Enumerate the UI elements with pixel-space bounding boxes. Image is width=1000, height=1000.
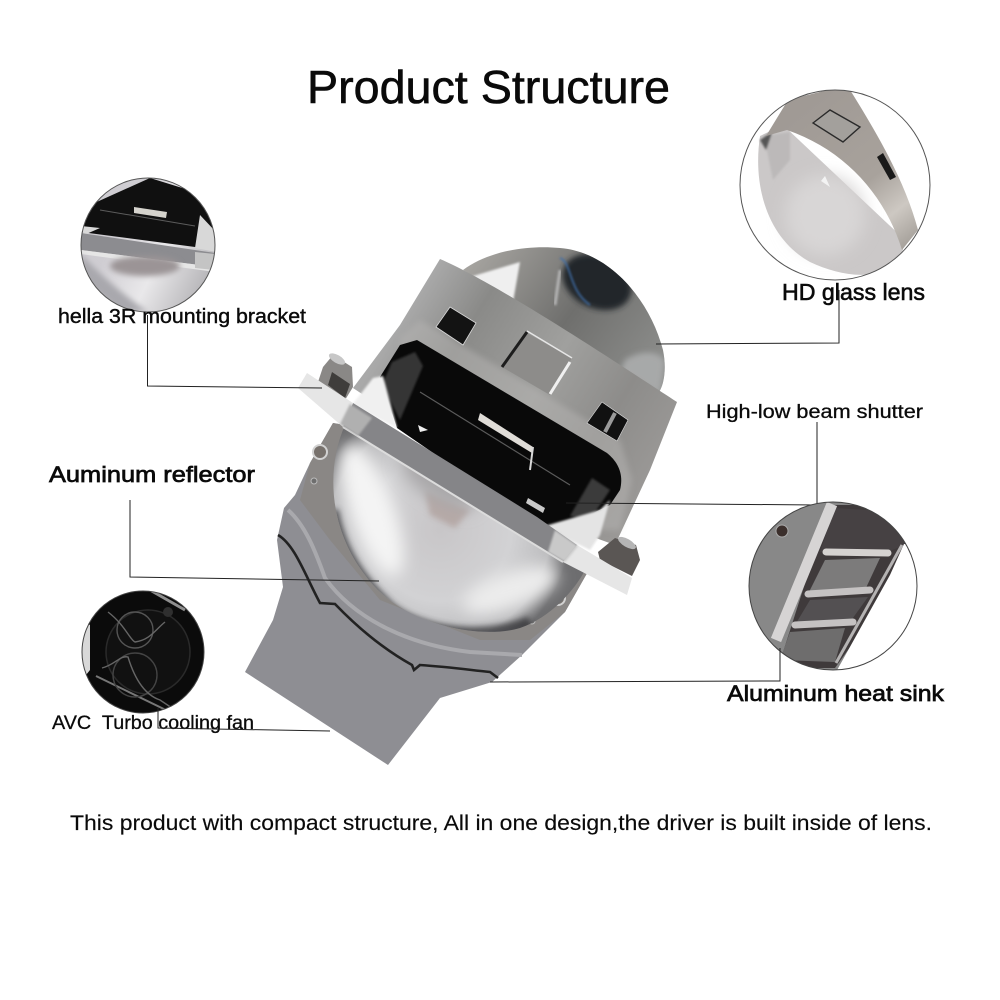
fan zoom circle: [82, 590, 206, 714]
callout: shutter: [566, 401, 924, 505]
white reflector highlights in opening: [352, 376, 610, 550]
bracket leader line: [148, 315, 322, 388]
mounting flange: [298, 373, 632, 595]
housing: [353, 259, 677, 545]
title: Product Structure: [307, 61, 670, 113]
housing window right: [587, 402, 628, 441]
lens zoom circle: [738, 85, 932, 282]
housing centre tab: [502, 331, 572, 395]
reflector label: Auminum reflector: [49, 462, 255, 487]
fan leader line: [158, 708, 330, 731]
lens leader line: [656, 290, 839, 344]
aluminum reflector dome: [327, 425, 585, 633]
heat sink body and tail: [245, 423, 590, 765]
housing window left: [436, 307, 476, 345]
heat sink zoom circle: [748, 500, 922, 672]
callout: reflector: [49, 462, 379, 581]
product photo: bi-LED projector lens: [245, 240, 677, 765]
callout: mounting bracket: [58, 178, 322, 388]
callout: heat sink: [490, 500, 945, 706]
heat sink leader line: [490, 648, 780, 682]
callout: glass lens: [656, 85, 932, 344]
callout: cooling fan: [52, 590, 330, 734]
black opening: [380, 340, 621, 530]
description text: This product with compact structure, All in one design,the driver is built inside of lens.: [70, 811, 932, 835]
bracket label: hella 3R mounting bracket: [58, 305, 306, 328]
shutter label: High-low beam shutter: [706, 401, 924, 423]
shutter leader line: [566, 422, 817, 505]
flange screw ears: [318, 351, 640, 576]
lens dome: [463, 247, 665, 391]
heat sink label: Aluminum heat sink: [727, 681, 945, 706]
bracket zoom circle: [80, 178, 218, 312]
fan label: AVC Turbo cooling fan: [52, 712, 254, 734]
screws on heat sink: [311, 445, 565, 624]
lens label: HD glass lens: [782, 279, 925, 305]
reflector leader line: [130, 500, 379, 581]
